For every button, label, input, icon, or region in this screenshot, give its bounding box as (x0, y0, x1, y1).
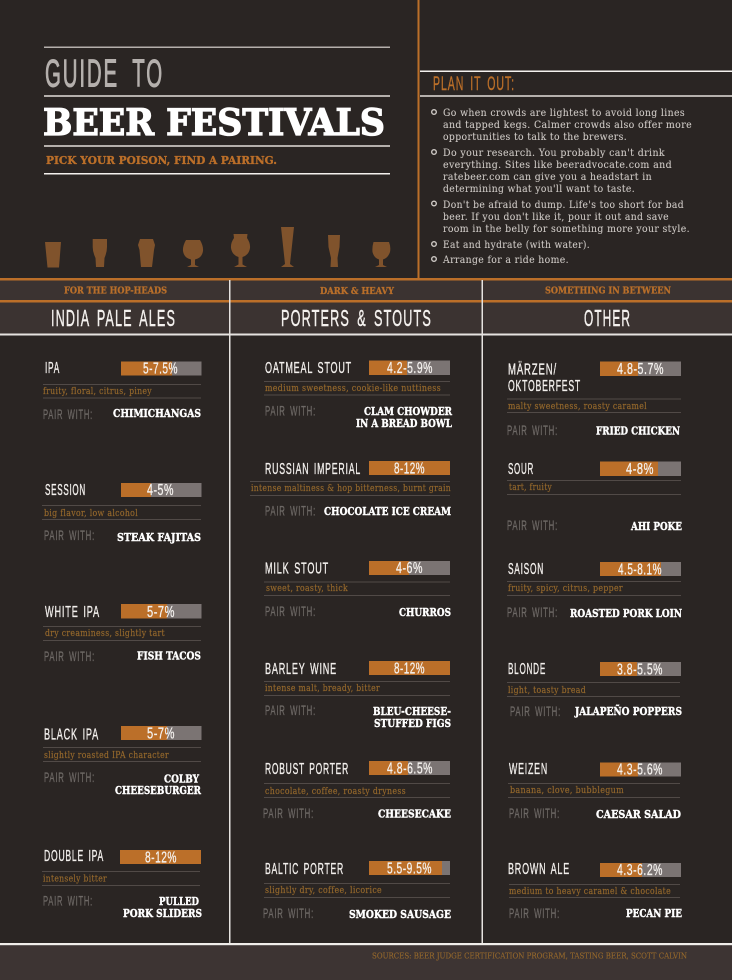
beer: marzen oktoberfest: OKTOBERFEST (508, 378, 581, 395)
beer: weizen: 4.3-5.6% (617, 762, 663, 778)
label: dark and heavy: DARK & HEAVY (320, 286, 394, 297)
label: for the hop-heads: FOR THE HOP-HEADS (64, 286, 167, 296)
beer: sour: PAIR WITH: (507, 517, 558, 533)
beer: weizen: banana, clove, bubblegum (510, 786, 624, 796)
beer: milk stout: PAIR WITH: (265, 603, 316, 619)
beer: white IPA: 5-7% (147, 604, 175, 621)
beer: blonde: PAIR WITH: (510, 703, 561, 719)
beer: session: SESSION (45, 482, 86, 499)
beer: oatmeal stout: IN A BREAD BOWL (356, 417, 452, 430)
beer: IPA: IPA (45, 360, 60, 377)
column header band (0, 278, 732, 336)
beer: weizen: WEIZEN (509, 761, 548, 778)
beer: russian imperial: 8-12% (394, 460, 425, 478)
beer: russian imperial: PAIR WITH: (265, 502, 316, 518)
beer: black IPA: 5-7% (147, 726, 175, 742)
beer: marzen oktoberfest: MÄRZEN/ (508, 360, 557, 378)
beer: IPA: fruity, floral, citrus, piney (43, 387, 152, 397)
beer: session: STEAK FAJITAS (117, 531, 201, 544)
beer: double IPA: DOUBLE IPA (44, 848, 104, 865)
tip 3: beer. If you don't like it, pour it out and save (443, 212, 669, 223)
beer: milk stout (264, 560, 451, 619)
beer: saison: 4.5-8.1% (618, 562, 662, 578)
beer: sour: AHI POKE (630, 520, 682, 533)
beer: white IPA: WHITE IPA (45, 604, 100, 621)
heading: guide to: GUIDE TO (45, 52, 164, 96)
heading: beer festivals: BEER FESTIVALS (43, 102, 385, 144)
beer: IPA: PAIR WITH: (43, 406, 93, 422)
heading: other: OTHER (584, 305, 631, 331)
beer: double IPA: PULLED (159, 895, 199, 908)
beer: double IPA: PORK SLIDERS (123, 907, 202, 920)
beer: session: 4-5% (147, 482, 174, 499)
beer: blonde: 3.8-5.5% (617, 662, 663, 678)
beer: session (42, 482, 202, 544)
beer: blonde: BLONDE (508, 661, 546, 678)
beer: robust porter: ROBUST PORTER (265, 761, 349, 778)
beer: saison: fruity, spicy, citrus, pepper (508, 584, 623, 594)
beer: baltic porter (263, 860, 451, 921)
beer: milk stout: CHURROS (399, 606, 451, 619)
beer: oatmeal stout: PAIR WITH: (265, 402, 316, 418)
beer: sour (507, 461, 682, 533)
beer: russian imperial: CHOCOLATE ICE CREAM (324, 505, 451, 518)
subtitle: PICK YOUR POISON, FIND A PAIRING. (46, 153, 277, 167)
beer: black IPA: BLACK IPA (44, 726, 99, 744)
beer: marzen oktoberfest (507, 360, 681, 438)
beer: oatmeal stout: 4.2-5.9% (387, 360, 433, 377)
beer: robust porter (263, 760, 451, 821)
beer: marzen oktoberfest: FRIED CHICKEN (596, 424, 680, 438)
beer: double IPA (42, 848, 202, 920)
tip 3 (432, 200, 690, 235)
beer: white IPA (43, 604, 202, 664)
column dividers (229, 280, 483, 943)
beer: robust porter: PAIR WITH: (263, 805, 314, 821)
tip 1: Go when crowds are lightest to avoid long lines (443, 108, 685, 119)
beer: brown ale (508, 861, 682, 921)
beer: sour: 4-8% (626, 461, 654, 478)
beer: brown ale: PAIR WITH: (509, 905, 560, 921)
beer: IPA (43, 360, 202, 422)
beer: double IPA: intensely bitter (43, 874, 107, 884)
tip 2 (432, 148, 672, 195)
tip 4: Eat and hydrate (with water). (443, 240, 590, 251)
footer with sources: SOURCES: BEER JUDGE CERTIFICATION PROGRAM, TASTING BEER, SCOTT CALVIN (372, 952, 687, 960)
beer: blonde: light, toasty bread (508, 686, 586, 696)
beer: session: big flavor, low alcohol (44, 509, 138, 519)
beer: weizen (508, 761, 681, 821)
beer: baltic porter: 5.5-9.5% (387, 860, 432, 878)
beer: brown ale: medium to heavy caramel & chocolate (509, 887, 671, 897)
beer: barley wine (264, 660, 451, 730)
tip 2: ratebeer.com can give you a headstart in (443, 172, 652, 183)
icons: beer glasses (45, 227, 390, 268)
beer: double IPA: 8-12% (145, 850, 177, 866)
beer: russian imperial (250, 460, 451, 518)
beer: sour: tart, fruity (509, 483, 552, 493)
beer: barley wine: BARLEY WINE (265, 661, 337, 678)
tip 2: everything. Sites like beeradvocate.com and (443, 160, 672, 171)
beer: black IPA (43, 726, 202, 797)
beer: white IPA: PAIR WITH: (44, 648, 95, 664)
beer: milk stout: MILK STOUT (265, 560, 329, 578)
beer: milk stout: sweet, roasty, thick (266, 584, 348, 594)
beer: saison: PAIR WITH: (507, 604, 558, 620)
tip 2: determining what you'll want to taste. (443, 184, 635, 195)
beer: baltic porter: SMOKED SAUSAGE (349, 908, 451, 921)
title block (43, 46, 390, 174)
beer: black IPA: slightly roasted IPA character (44, 751, 169, 761)
beer: white IPA: dry creaminess, slightly tart (45, 629, 165, 639)
beer: brown ale: BROWN ALE (508, 861, 570, 878)
beer: robust porter: 4.8-6.5% (387, 760, 433, 778)
beer: oatmeal stout (264, 360, 453, 430)
beer: baltic porter: BALTIC PORTER (265, 861, 344, 878)
label: something in between: SOMETHING IN BETWEEN (545, 286, 671, 296)
beer: milk stout: 4-6% (396, 560, 423, 577)
beer: white IPA: FISH TACOS (137, 650, 201, 662)
beer: saison: ROASTED PORK LOIN (570, 607, 682, 620)
tip 5: Arrange for a ride home. (442, 255, 569, 266)
beer: russian imperial: RUSSIAN IMPERIAL (265, 461, 361, 478)
beer: black IPA: PAIR WITH: (44, 769, 95, 785)
tip 3: Don't be afraid to dump. Life's too short for bad (443, 200, 684, 211)
beer: barley wine: intense malt, bready, bitter (265, 684, 380, 694)
beer: baltic porter: PAIR WITH: (263, 905, 314, 921)
beer: weizen: PAIR WITH: (509, 805, 560, 821)
heading: porters and stouts: PORTERS & STOUTS (281, 305, 432, 331)
beer: black IPA: COLBY (164, 772, 199, 786)
tip 3: room in the belly for something more your style. (443, 224, 690, 235)
beer: blonde: JALAPEÑO POPPERS (574, 704, 682, 718)
beer: robust porter: chocolate, coffee, roasty dryness (265, 787, 406, 797)
beer: sour: SOUR (508, 461, 534, 478)
beer: double IPA: PAIR WITH: (43, 892, 93, 908)
tip 1: opportunities to talk to the brewers. (443, 132, 627, 143)
tip 2: Do your research. You probably can't drink (443, 148, 666, 159)
beer: oatmeal stout: medium sweetness, cookie-like nuttiness (265, 384, 441, 394)
beer: IPA: 5-7.5% (143, 360, 178, 378)
beer: marzen oktoberfest: PAIR WITH: (507, 422, 558, 438)
beer: marzen oktoberfest: malty sweetness, roasty caramel (508, 402, 647, 412)
tip 1: and tapped kegs. Calmer crowds also offer more (443, 120, 692, 131)
beer: barley wine: 8-12% (394, 660, 425, 678)
beer: baltic porter: slightly dry, coffee, licorice (265, 886, 382, 896)
heading: plan it out: PLAN IT OUT: (433, 74, 515, 95)
beer: barley wine: PAIR WITH: (265, 702, 316, 718)
panel: plan it out (418, 0, 732, 279)
beer: robust porter: CHEESECAKE (378, 808, 451, 820)
tip 1 (432, 108, 692, 143)
beer: oatmeal stout: OATMEAL STOUT (265, 360, 352, 377)
beer: barley wine: BLEU-CHEESE- (373, 705, 451, 718)
beer: saison (507, 561, 682, 620)
beer: russian imperial: intense maltiness & hop bitterness, burnt grain (251, 484, 451, 494)
footer with sources (0, 943, 732, 980)
heading: india pale ales: INDIA PALE ALES (51, 305, 176, 331)
beer: IPA: CHIMICHANGAS (113, 407, 201, 420)
beer: blonde (507, 661, 682, 719)
beer: oatmeal stout: CLAM CHOWDER (364, 405, 453, 418)
beer: saison: SAISON (508, 561, 544, 578)
beer: weizen: CAESAR SALAD (596, 808, 681, 821)
beer: brown ale: 4.3-6.2% (617, 862, 663, 879)
beer: brown ale: PECAN PIE (626, 907, 682, 920)
beer: marzen oktoberfest: 4.8-5.7% (617, 361, 664, 378)
beer: session: PAIR WITH: (44, 527, 95, 543)
beer: barley wine: STUFFED FIGS (374, 717, 451, 730)
beer: black IPA: CHEESEBURGER (115, 784, 202, 797)
